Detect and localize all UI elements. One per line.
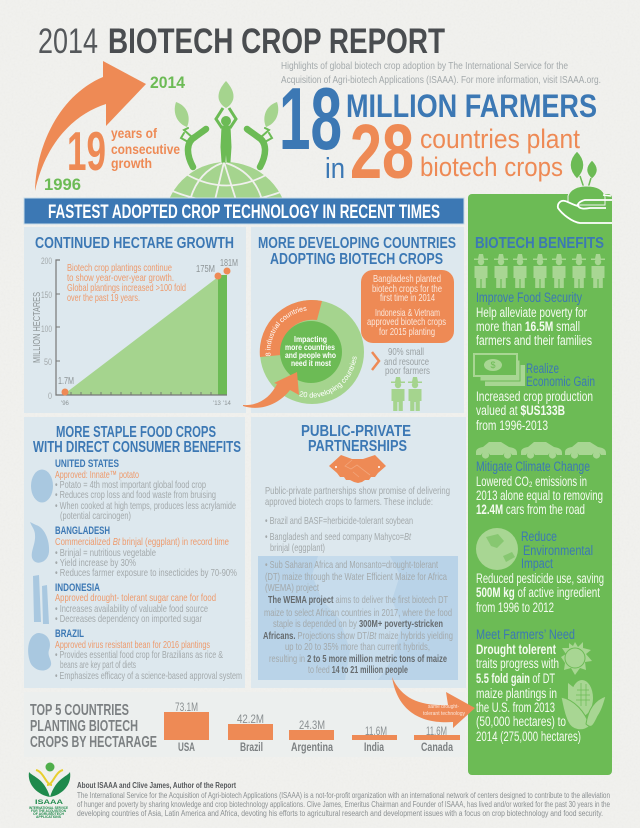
donut chart: Impacting [294,335,327,344]
donut chart [260,300,364,404]
indonesia: Approved drought- tolerant sugar cane for food [55,592,216,604]
bangladesh: Commercialized Bt brinjal (eggplant) in record time [55,536,229,548]
heading: PARTNERSHIPS [308,438,407,455]
icon: curved orange arrow [35,61,146,191]
intro text: brinjal (eggplant) [270,542,325,554]
brazil: • Emphasizes efficacy of a science-based approval system [55,670,242,682]
heading: MORE STAPLE FOOD CROPS [56,424,216,441]
bar chart: Argentina [291,742,333,754]
bar chart: India [364,742,384,754]
19 years of consecutive growth: years of [111,125,157,141]
callout: WEMA project [258,556,458,680]
panel: staple food crops [24,417,245,688]
callout: new countries: for 2015 planting [379,326,435,338]
headline: 18 million farmers in 28 countries: 18 [279,69,342,168]
area chart: MILLION HECTARES [32,292,43,363]
realize economic gain: valued at $US133B [476,403,565,418]
area chart: '13 [213,401,222,407]
heading: WITH DIRECT CONSUMER BENEFITS [33,439,241,456]
icon: bean [28,633,51,671]
right figure [247,128,272,167]
area chart: '96 [61,401,70,407]
area chart: 200 [41,256,52,266]
90 percent small farmers [384,346,430,411]
heading: TOP 5 COUNTRIES [30,702,129,719]
bar chart: Canada [421,742,453,754]
meet farmers need: maize plantings in [476,686,557,701]
headline: 18 million farmers in 28 countries: in [325,153,345,185]
icon: hand holding plant [558,151,612,223]
arrow into donut [243,372,299,408]
chart note: Biotech crop plantings continue [67,262,172,274]
center leaf [218,81,234,108]
icon: money stack [474,354,525,386]
area chart: 1.7M [58,375,74,387]
intro text: • Bangladesh and seed company Mahyco=Bt [265,531,412,543]
ISAAA logo: APPLICATIONS [36,815,62,819]
africa silhouette [312,556,402,680]
bar chart: 42.2M [237,712,264,726]
right leaf [264,102,278,127]
icon: corn [561,680,606,730]
heading: CONTINUED HECTARE GROWTH [35,235,234,252]
chart note [67,262,186,304]
mitigate climate change: Mitigate Climate Change [476,459,590,474]
improve food security: farmers and their families [476,333,592,348]
19 years of consecutive growth: consecutive [111,141,180,157]
brazil: beans are key part of diets [60,659,136,671]
callout: WEMA project: to feed 14 to 21 million people [308,664,408,676]
heading: BIOTECH BENEFITS [475,235,604,252]
callout: WEMA project: resulting in 2 to 5 more million metric tons of maize [269,653,447,665]
heading [258,235,456,268]
title [38,22,445,61]
arrow to drought-tolerant benefit [392,677,475,728]
reduce environmental impact: Environmental [523,543,593,558]
heading [33,424,241,456]
19 years of consecutive growth: growth [111,155,152,171]
chart note: over the past 19 years. [67,292,140,304]
improve food security: more than 16.5M small [476,319,580,334]
panel: public-private partnerships [251,417,466,688]
meet farmers need: 2014 (275,000 hectares) [476,729,581,744]
section banner: FASTEST ADOPTED CROP TECHNOLOGY IN RECENT TIMES [48,202,440,223]
intro text: • Brazil and BASF=herbicide-tolerant soybean [265,515,413,527]
callout: WEMA project: maize to select African countries in 2017, where the food [264,607,452,619]
19 years of consecutive growth: 19 [67,120,106,182]
united states [55,458,236,522]
icon: money stack: $ [490,360,496,370]
headline: 18 million farmers in 28 countries [279,69,597,195]
brazil: Approved virus resistant bean for 2016 plantings [55,639,210,651]
bangladesh: • Yield increase by 30% [55,557,136,569]
panel: continued hectare growth [24,227,246,413]
donut chart: 8 industrial countries [265,307,307,356]
globe [170,162,282,198]
area chart: 175M [196,263,215,275]
19 years of consecutive growth [67,120,180,182]
callout: WEMA project: staple is depended on by 300M+ poverty-stricken [273,618,443,630]
icon: potato [31,470,53,502]
heading: PLANTING BIOTECH [30,718,138,735]
bangladesh: BANGLADESH [55,525,110,537]
90 percent small farmers: and resource [384,356,429,368]
icon: handshake [329,455,386,483]
90 percent small farmers: 90% small [388,346,424,358]
headline: 18 million farmers in 28 countries: biotech crops [420,152,563,182]
left figure [181,128,206,167]
intro text: Public-private partnerships show promise of delivering [265,485,450,497]
united states: UNITED STATES [55,458,119,470]
headline: 18 million farmers in 28 countries: countries plant [420,124,580,154]
realize economic gain: from 1996-2013 [476,418,548,433]
icon: farmers holding leaves on globe [170,81,282,198]
reduce environmental impact: Impact [521,556,553,571]
meet farmers need: traits progress with [476,656,559,671]
callout: WEMA project: (WEMA) project [265,582,319,594]
realize economic gain [476,361,595,433]
indonesia: INDONESIA [55,582,100,594]
heading: ADOPTING BIOTECH CROPS [270,251,443,268]
arrow to drought-tolerant benefit: same drought- [428,704,459,710]
bar chart: 24.3M [299,718,325,732]
area chart: 150 [41,290,52,300]
callout: WEMA project: Africans. Projections show DT/Bt maize hybrids yielding [263,630,453,642]
callout: new countries: approved biotech crops [367,316,446,328]
bangladesh [55,525,237,579]
title: 2014 [38,22,98,61]
meet farmers need: the U.S. from 2013 [476,700,555,715]
icon: row of farmers [474,254,605,288]
indonesia: • Decreases dependency on imported sugar [55,613,202,625]
area chart: 100 [41,324,52,334]
90 percent small farmers: poor farmers [385,365,430,377]
heading [30,702,157,751]
ISAAA logo [29,762,70,819]
bar chart [164,700,460,754]
donut chart: and people who [285,351,336,360]
headline: 18 million farmers in 28 countries: 28 [350,109,414,195]
left leaf [175,102,189,127]
callout: new countries: first time in 2014 [380,292,435,304]
growth arrow 1996 to 2014 [35,61,185,194]
realize economic gain: Economic Gain [526,374,595,389]
meet farmers need: Meet Farmers’ Need [476,627,575,642]
bar chart: Brazil [240,742,263,754]
arrow to drought-tolerant benefit: tolerant technology [423,711,465,717]
ISAAA logo: INTERNATIONAL SERVICE [29,806,69,810]
improve food security: Improve Food Security [476,290,582,305]
callout: WEMA project: (DT) maize through the Water Efficient Maize for Africa [265,571,447,583]
mitigate climate change: 12.4M cars from the road [476,502,585,517]
callout: WEMA project: • Sub Saharan Africa and Monsanto=drought-tolerant [265,559,438,571]
panel background [468,194,612,775]
section banner [24,198,464,224]
improve food security: Help alleviate poverty for [476,305,587,320]
callout: new countries [361,270,454,343]
ISAAA logo: OF AGRI-BIOTECH [33,812,64,816]
label: 2014: 2014 [150,73,185,92]
united states: Approved: Innate™ potato [55,469,139,481]
heading [301,423,411,455]
about text: About ISAAA and Clive James, Author of the Report [77,781,236,790]
bar chart: 11.6M [365,724,387,738]
meet farmers need: Drought tolerent [476,642,556,657]
heading: CROPS BY HECTARAGE [30,734,157,751]
icon: sun [561,642,592,675]
reduce environmental impact [476,529,604,615]
panel: more developing countries [243,227,464,413]
intro text [281,60,601,86]
bar chart: USA [178,742,195,754]
brazil [55,628,242,682]
top 5 countries band [24,692,465,757]
area chart [32,256,238,407]
meet farmers need: (50,000 hectares) to [476,714,566,729]
realize economic gain: Realize [526,361,559,376]
reduce environmental impact: 500M kg of active ingredient [476,585,600,600]
area chart: 50 [44,357,52,367]
center figure [216,108,236,162]
heading: PUBLIC-PRIVATE [301,423,411,440]
indonesia: • Increases availability of valuable food source [55,603,208,615]
icon: eggplant [30,522,49,563]
label: 1996: 1996 [44,175,81,194]
mitigate climate change: Lowered CO₂ emissions in [476,474,587,489]
donut chart: 20 developing countries [299,356,357,398]
donut chart: need it most [291,359,331,368]
title: BIOTECH CROP REPORT [108,22,445,61]
icon: three cars [476,442,606,459]
callout: WEMA project: up to 20 to 35% more than current hybrids, [285,641,430,653]
chart note: to show year-over-year growth. [67,272,174,284]
brazil: • Provides essential food crop for Brazilians as rice & [55,649,223,661]
intro text: approved biotech crops to farmers. These include: [265,496,433,508]
callout: new countries: Bangladesh planted [373,273,441,285]
ISAAA logo: FOR THE ACQUISITION [31,809,66,813]
icon: chevron [372,352,379,370]
ISAAA logo: ISAAA [35,799,63,806]
united states: • When cooked at high temps, produces less acrylamide [55,500,236,512]
bar chart: 11.6M [426,724,447,738]
about text [77,781,610,818]
area chart: 181M [220,257,238,269]
area chart: '14 [223,401,232,407]
bangladesh: • Brinjal = nutritious vegetable [55,547,156,559]
chart note: Global plantings increased >100 fold [67,282,186,294]
meet farmers need [476,627,581,744]
bangladesh: • Reduces farmer exposure to insecticides by 70-90% [55,567,237,579]
icon: globe [476,528,518,570]
realize economic gain: Increased crop production [476,389,593,404]
callout: new countries: Indonesia & Vietnam [375,307,440,319]
intro text [265,485,450,554]
callout: new countries: biotech crops for the [372,283,442,295]
brazil: BRAZIL [55,628,84,640]
meet farmers need: 5.5 fold gain of DT [476,671,555,686]
donut chart: more countries [285,343,335,352]
united states: • Reduces crop loss and food waste from bruising [55,489,216,501]
indonesia [55,582,216,625]
panel: biotech benefits [468,151,612,775]
reduce environmental impact: from 1996 to 2012 [476,600,554,615]
intro text: Highlights of global biotech crop adoption by The International Service for the [281,60,568,72]
united states: (potential carcinogen) [60,510,131,522]
united states: • Potato = 4th most important global food crop [55,479,206,491]
reduce environmental impact: Reduce [521,529,557,544]
bar chart: 73.1M [175,700,198,714]
headline: 18 million farmers in 28 countries: MILLION FARMERS [346,88,597,124]
area chart: 0 [48,391,52,401]
mitigate climate change [476,459,603,517]
icon: sugar cane [33,575,49,624]
improve food security [476,290,592,348]
heading: MORE DEVELOPING COUNTRIES [258,235,456,252]
callout: WEMA project: The WEMA project aims to deliver the first biotech DT [268,594,448,606]
